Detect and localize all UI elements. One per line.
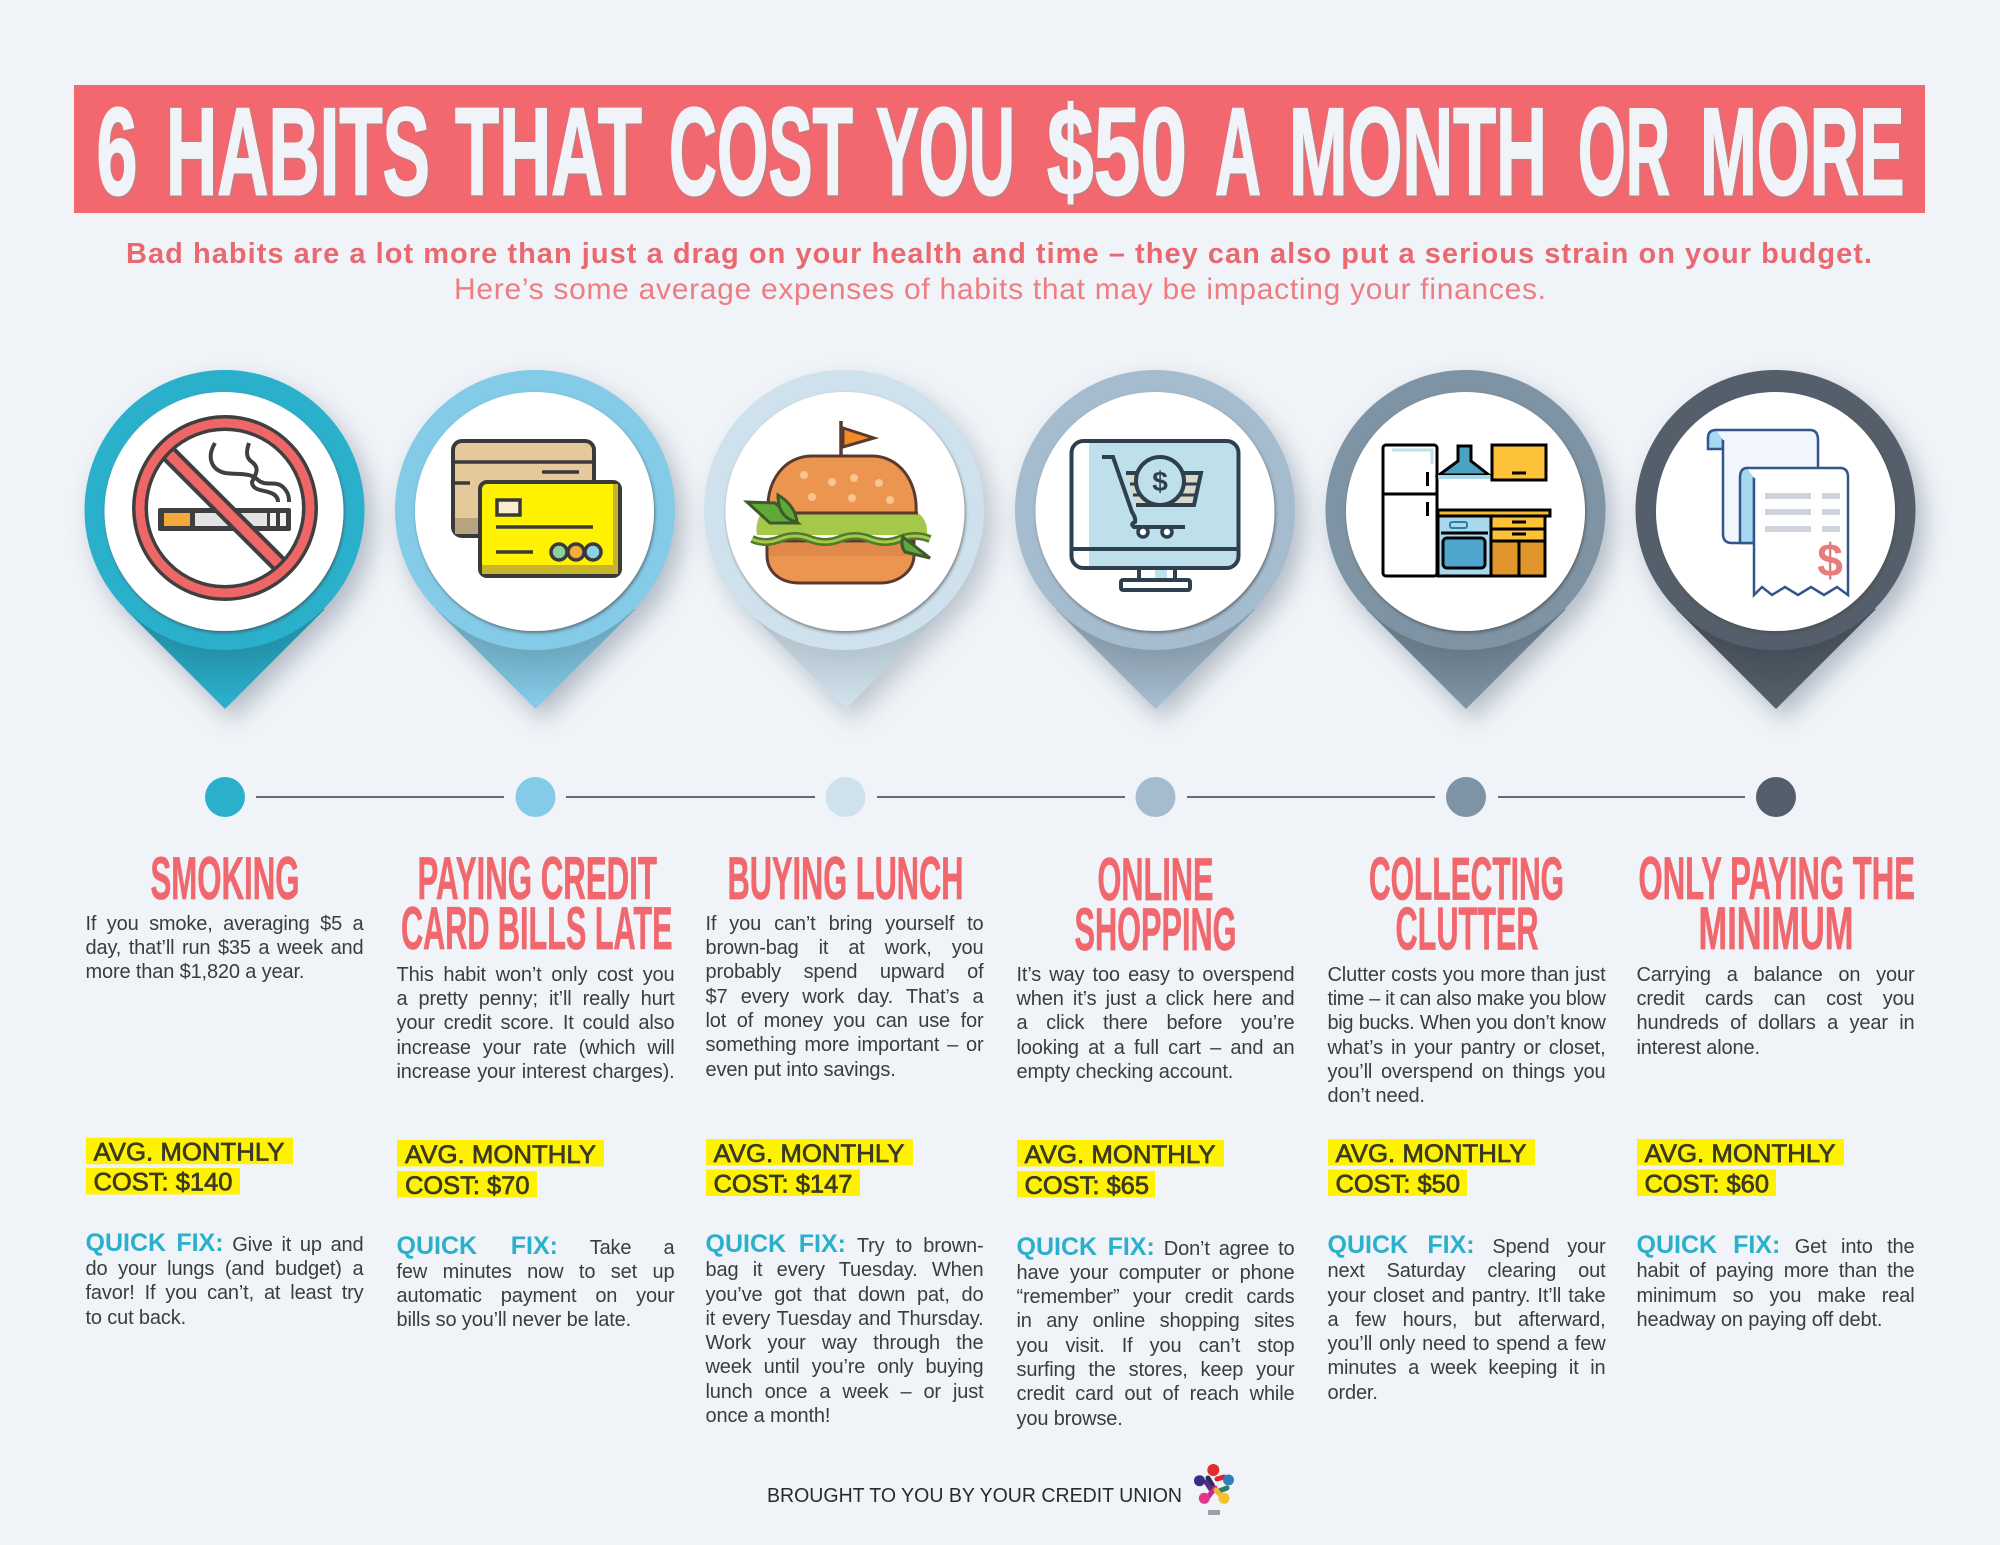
quick fix	[706, 1230, 984, 1427]
average monthly cost	[1636, 1139, 1844, 1198]
logo	[1194, 1464, 1234, 1515]
description	[706, 913, 984, 1081]
quick fix: headway on paying off debt.	[1636, 1309, 1882, 1331]
description: something more important – or	[706, 1034, 984, 1056]
heading: online shopping: ONLINE	[1097, 846, 1213, 913]
subtitle	[126, 238, 1872, 306]
quick fix: you visit. If you can’t stop	[1016, 1335, 1294, 1357]
description: brown-bag it at work, you	[706, 937, 984, 959]
average monthly cost	[1016, 1140, 1224, 1200]
average monthly cost	[396, 1140, 604, 1200]
heading: collecting clutter: COLLECTING	[1368, 846, 1564, 912]
title banner: OR	[1578, 84, 1670, 222]
heading: online shopping: SHOPPING	[1074, 896, 1236, 963]
description	[1328, 964, 1606, 1107]
quick fix: QUICK FIX: Spend your	[1328, 1231, 1606, 1259]
average monthly cost: COST: $147	[713, 1170, 852, 1198]
title banner: YOU	[876, 84, 1015, 222]
title banner: MONTH	[1289, 84, 1547, 222]
quick fix: you browse.	[1016, 1408, 1123, 1430]
icon: no smoking	[140, 423, 310, 593]
description: interest alone.	[1636, 1037, 1760, 1059]
heading: smoking: SMOKING	[150, 845, 299, 912]
average monthly cost: AVG. MONTHLY	[1644, 1140, 1835, 1168]
description: looking at a full cart – and an	[1016, 1037, 1294, 1059]
description: you’ll overspend on things you	[1328, 1061, 1606, 1083]
quick fix: Work your way through the	[706, 1332, 984, 1354]
quick fix: in any online shopping sites	[1016, 1310, 1294, 1332]
title banner: COST	[669, 84, 853, 222]
description: day, that’ll run $35 a week and	[86, 937, 364, 959]
description: $7 every work day. That’s a	[706, 986, 984, 1008]
quick fix: habit of paying more than the	[1636, 1260, 1914, 1282]
quick fix	[1328, 1231, 1606, 1404]
heading: online shopping	[1074, 846, 1236, 963]
heading: buying lunch: BUYING LUNCH	[727, 845, 963, 912]
quick fix: “remember” your credit cards	[1016, 1286, 1294, 1308]
quick fix: once a month!	[706, 1405, 830, 1427]
quick fix: favor! If you can’t, at least try	[86, 1282, 364, 1304]
panel: online shopping	[1016, 846, 1295, 1430]
description: It’s way too easy to overspend	[1016, 964, 1294, 986]
description: hundreds of dollars a year in	[1636, 1012, 1914, 1034]
description	[86, 913, 364, 983]
quick fix: credit card out of reach while	[1016, 1383, 1294, 1405]
panel: paying credit card bills late	[396, 845, 675, 1331]
heading: paying credit card bills late: PAYING CREDIT	[417, 845, 656, 912]
quick fix: minimum so you make real	[1636, 1285, 1914, 1307]
description: time – it can also make you blow	[1328, 988, 1606, 1010]
title banner	[74, 84, 1925, 222]
heading: collecting clutter: CLUTTER	[1395, 896, 1538, 962]
description: a pretty penny; it’ll really hurt	[396, 988, 674, 1010]
description: probably spend upward of	[706, 961, 984, 983]
title banner: $50	[1047, 84, 1187, 222]
quick fix: your closet and pantry. It’ll take	[1328, 1285, 1606, 1307]
icon: monitor with cart: $	[1152, 466, 1168, 497]
quick fix	[1636, 1231, 1915, 1331]
icon: receipts	[1708, 430, 1848, 595]
description: increase your interest charges).	[396, 1061, 674, 1083]
quick fix: next Saturday clearing out	[1328, 1260, 1606, 1282]
heading: only paying the minimum: MINIMUM	[1698, 895, 1853, 962]
quick fix: bills so you’ll never be late.	[396, 1309, 631, 1331]
quick fix: have your computer or phone	[1016, 1262, 1294, 1284]
description: lot of money you can use for	[706, 1010, 984, 1032]
timeline	[205, 777, 1796, 817]
quick fix: it every Tuesday and Thursday.	[706, 1308, 984, 1330]
average monthly cost: AVG. MONTHLY	[404, 1141, 596, 1169]
quick fix: week until you’re only buying	[706, 1356, 984, 1378]
description	[1016, 964, 1294, 1083]
icon: credit cards	[453, 441, 620, 576]
description: This habit won’t only cost you	[396, 964, 674, 986]
heading: paying credit card bills late	[400, 845, 672, 962]
footer: BROUGHT TO YOU BY YOUR CREDIT UNION	[767, 1485, 1182, 1507]
title banner: A	[1215, 84, 1261, 222]
heading: collecting clutter	[1368, 846, 1564, 962]
panel: collecting clutter	[1328, 846, 1606, 1404]
average monthly cost: AVG. MONTHLY	[93, 1139, 284, 1167]
title banner: 6	[96, 84, 138, 222]
subtitle: Bad habits are a lot more than just a drag on your health and time – they can also put a serious strain on your budget.	[126, 238, 1872, 270]
quick fix	[86, 1229, 364, 1329]
description: your credit score. It could also	[396, 1012, 674, 1034]
description: empty checking account.	[1016, 1061, 1233, 1083]
description	[396, 964, 675, 1083]
icon: monitor with cart	[1072, 441, 1238, 590]
quick fix: QUICK FIX: Get into the	[1636, 1231, 1915, 1259]
average monthly cost	[1328, 1139, 1534, 1198]
quick fix: few minutes now to set up	[396, 1261, 674, 1283]
average monthly cost	[706, 1139, 912, 1198]
quick fix: to cut back.	[86, 1307, 186, 1329]
pin 6: receipts icon	[1636, 370, 1924, 720]
quick fix: QUICK FIX: Don’t agree to	[1016, 1233, 1295, 1261]
average monthly cost: COST: $70	[404, 1172, 529, 1200]
description: credit cards can cost you	[1636, 988, 1914, 1010]
quick fix: automatic payment on your	[396, 1285, 674, 1307]
quick fix: order.	[1328, 1382, 1378, 1404]
icon: kitchen	[1383, 445, 1550, 576]
average monthly cost: COST: $65	[1024, 1172, 1148, 1200]
subtitle: Here’s some average expenses of habits that may be impacting your finances.	[454, 273, 1546, 306]
quick fix: surfing the stores, keep your	[1016, 1359, 1294, 1381]
quick fix: minutes a week keeping it in	[1328, 1357, 1606, 1379]
description: when it’s just a click here and	[1016, 988, 1294, 1010]
pin 2: credit cards icon	[395, 370, 683, 720]
quick fix: QUICK FIX: Take a	[396, 1232, 674, 1260]
title banner: THAT	[455, 84, 642, 222]
quick fix: bag it every Tuesday. When	[706, 1259, 984, 1281]
heading: only paying the minimum	[1638, 845, 1914, 962]
quick fix: you’ve got that down pat, do	[706, 1284, 984, 1306]
pin 3: burger icon	[704, 370, 993, 720]
average monthly cost: COST: $50	[1335, 1170, 1460, 1198]
average monthly cost	[86, 1138, 292, 1197]
panel: only paying the minimum	[1636, 845, 1915, 1331]
quick fix: do your lungs (and budget) a	[86, 1258, 364, 1280]
average monthly cost: AVG. MONTHLY	[713, 1140, 904, 1168]
panel: smoking	[86, 845, 364, 1329]
description: If you smoke, averaging $5 a	[86, 913, 364, 935]
quick fix: a few hours, but afterward,	[1328, 1309, 1606, 1331]
description: Clutter costs you more than just	[1328, 964, 1606, 986]
icon: burger	[747, 421, 930, 583]
description: more than $1,820 a year.	[86, 961, 304, 983]
description: even put into savings.	[706, 1059, 896, 1081]
panel: buying lunch	[706, 845, 984, 1427]
average monthly cost: AVG. MONTHLY	[1024, 1141, 1215, 1169]
pin 5: kitchen icon	[1326, 370, 1613, 720]
quick fix: you’ll only need to spend a few	[1328, 1333, 1606, 1355]
description: increase your rate (which will	[396, 1037, 674, 1059]
description: Carrying a balance on your	[1636, 964, 1914, 986]
description: If you can’t bring yourself to	[706, 913, 984, 935]
quick fix: QUICK FIX: Try to brown-	[706, 1230, 984, 1258]
description: big bucks. When you don’t know	[1328, 1012, 1606, 1034]
description: don’t need.	[1328, 1085, 1425, 1107]
average monthly cost: AVG. MONTHLY	[1335, 1140, 1526, 1168]
icon: receipts: $	[1817, 534, 1843, 586]
quick fix	[396, 1232, 675, 1331]
quick fix: lunch once a week – or just	[706, 1381, 984, 1403]
description: a click there before you’re	[1016, 1012, 1294, 1034]
heading: paying credit card bills late: CARD BILLS LATE	[400, 895, 672, 962]
quick fix: QUICK FIX: Give it up and	[86, 1229, 364, 1257]
title banner: HABITS	[166, 84, 430, 222]
quick fix	[1016, 1233, 1295, 1430]
description: what’s in your pantry or closet,	[1328, 1037, 1606, 1059]
average monthly cost: COST: $60	[1644, 1170, 1768, 1198]
pin 4: online shopping icon	[1015, 370, 1303, 720]
description	[1636, 964, 1914, 1059]
average monthly cost: COST: $140	[93, 1169, 232, 1197]
pin 1: no smoking icon	[84, 370, 373, 720]
